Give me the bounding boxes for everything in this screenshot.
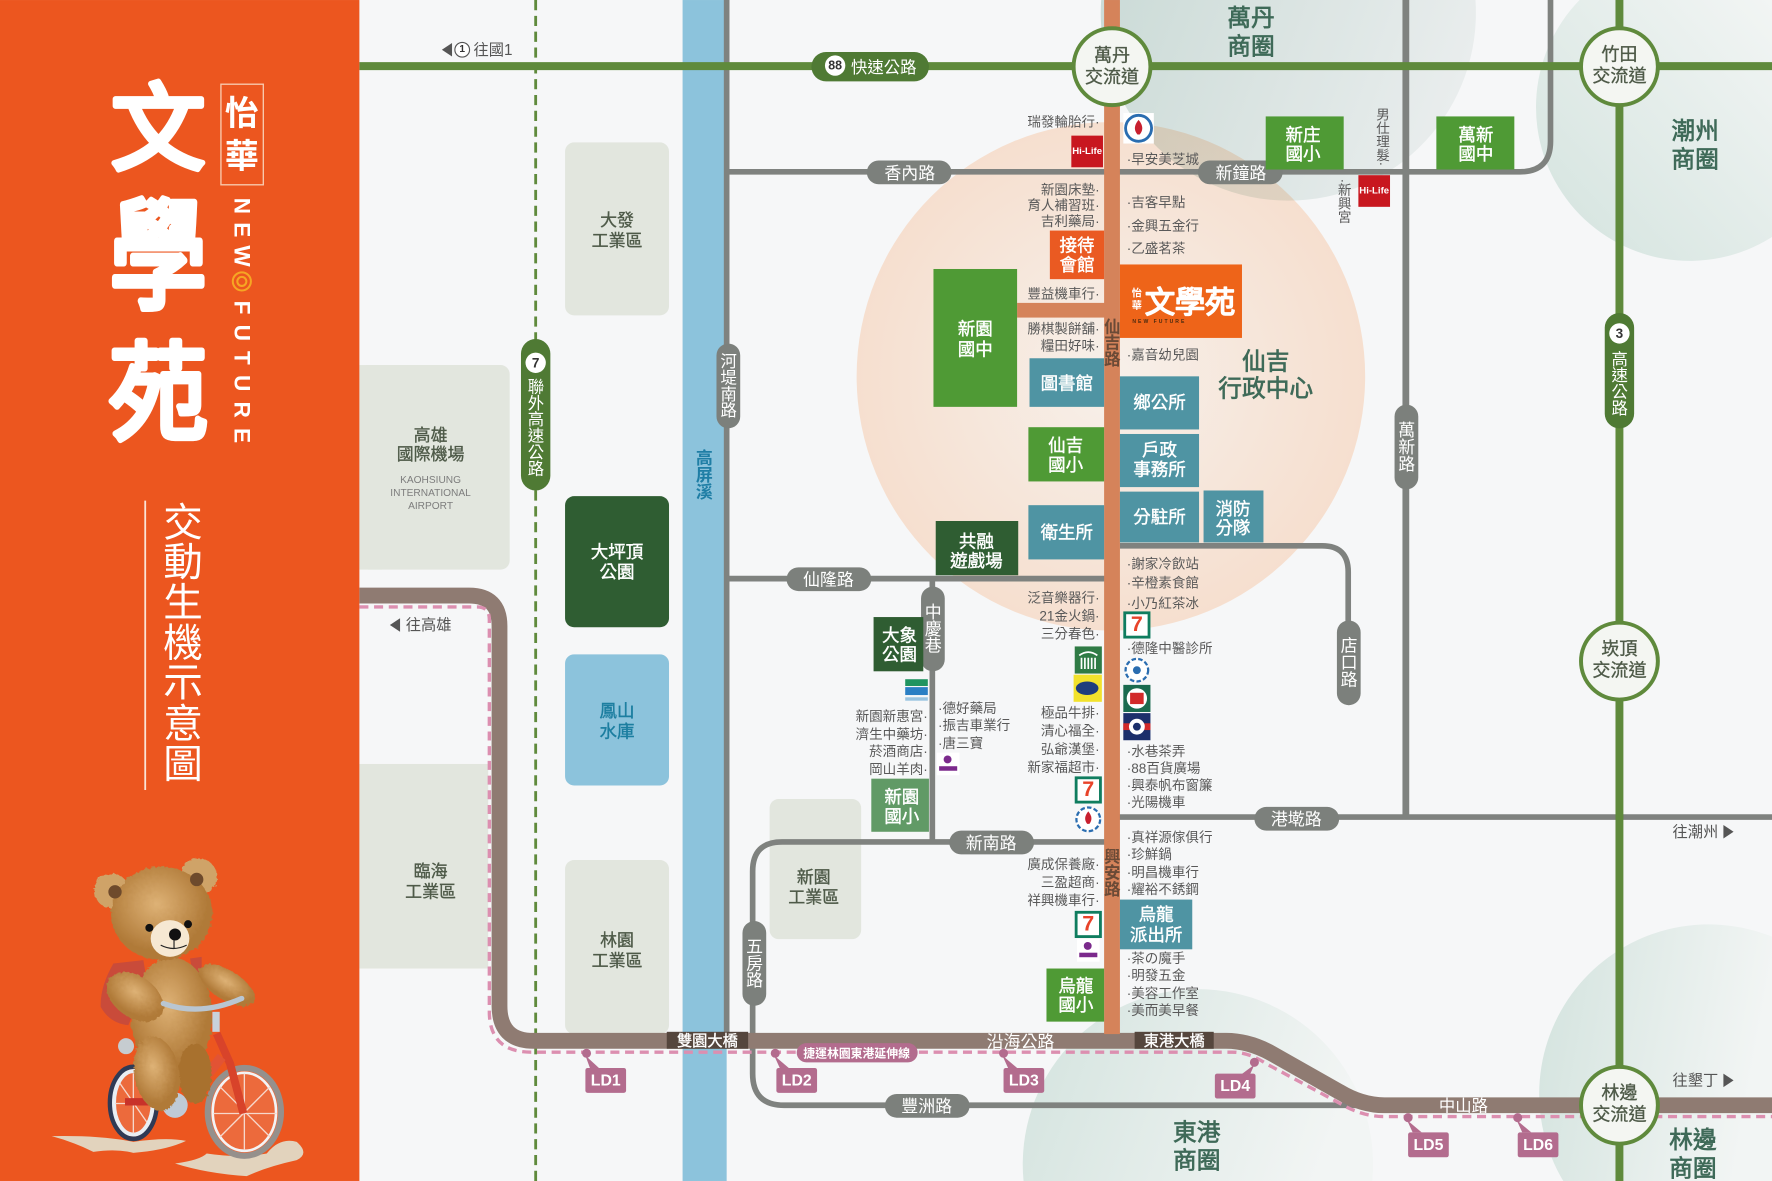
map background	[359, 0, 1772, 1181]
subtitle: traffic map: 機	[163, 622, 203, 666]
subtitle: traffic map: 生	[163, 581, 203, 625]
road label: Zhongqing lane	[921, 587, 945, 671]
metro line label: 捷運林園東港延伸線	[803, 1046, 910, 1060]
road: freeway 3	[1616, 0, 1623, 1181]
zone: Dafa industrial park	[565, 142, 669, 315]
circle: Linbian shopping district area	[1539, 924, 1772, 1181]
reservoir: Fengshan	[565, 654, 669, 785]
road label: Gangqian: 港墘路	[1271, 810, 1322, 829]
road label: Wufang: 五房路	[743, 937, 763, 988]
shops: right of main road: ·光陽機車	[1127, 795, 1185, 810]
road label: Xinnan	[949, 831, 1034, 854]
subtitle: traffic map: 意	[163, 702, 203, 746]
circle: Wandan shopping district area	[1101, 0, 1476, 201]
metro line: Linyuan Donggang extension	[359, 607, 1772, 1117]
road label: Donggang bridge: 東港大橋	[1144, 1033, 1205, 1050]
interchange: Zhutian	[1581, 28, 1658, 105]
logo: yellow shop	[1074, 675, 1102, 702]
road label: freeway 3	[1605, 313, 1634, 428]
shops: left of main road, north: 糧田好味·	[1041, 338, 1100, 353]
road label: Zhongshan: 中山路	[1439, 1097, 1488, 1115]
road: coastal highway	[359, 596, 1772, 1105]
district label: Wandan	[1227, 5, 1275, 60]
project logo: Wenxueyuan: 怡	[1132, 286, 1142, 299]
logo: clinic	[1126, 659, 1148, 681]
logo: Hi-Life north	[1071, 136, 1103, 167]
interchange: Linbian: 交流道	[1592, 1105, 1647, 1125]
icon: orange flower ornament	[233, 272, 251, 290]
title: Wenxueyuan: 文	[111, 77, 206, 183]
shops: left of main road, south: 三分春色·	[1041, 626, 1100, 642]
subtitle: traffic map: 交	[163, 501, 203, 545]
title: Wenxueyuan	[108, 77, 208, 454]
shops: along Zhongqing lane, east: ·德好藥局	[938, 701, 997, 716]
logo: Hi-Life north: Hi-Life	[1072, 146, 1102, 157]
library: 圖書館	[1041, 373, 1093, 393]
station: LD5: LD5	[1414, 1137, 1444, 1154]
shops: right of main road: ·茶の魔手	[1127, 951, 1185, 966]
district label: Donggang: 東港	[1173, 1119, 1221, 1146]
shops: right of main road: ·明發五金	[1127, 968, 1186, 983]
road label: expressway 88: 88	[828, 59, 842, 73]
township office	[1120, 376, 1199, 429]
river: Gaoping	[683, 0, 727, 1181]
reception hall: 接待	[1059, 236, 1094, 256]
direction: to Chaozhou: 往潮州	[1673, 824, 1718, 841]
shops: along Zhongqing lane, west	[856, 709, 928, 777]
logo: post office style	[1123, 685, 1150, 712]
zone: Linhai industrial park: 工業區	[405, 883, 456, 902]
household registration office	[1120, 434, 1199, 487]
subtitle: traffic map: 圖	[163, 743, 203, 787]
school: Xinyuan junior high: 國中	[958, 340, 993, 360]
shops: right of main road: ·金興五金行	[1127, 219, 1199, 234]
shops: left of main road, north: 勝棋製餅舖·	[1027, 321, 1100, 336]
shops: left of main road, south: 新家福超市·	[1027, 759, 1100, 775]
metro line label	[797, 1043, 918, 1062]
park: Dapingding: 大坪頂	[591, 542, 644, 562]
circle: Chaozhou shopping district area	[1536, 0, 1772, 261]
shops: right of main road: ·乙盛茗茶	[1127, 241, 1186, 256]
shops: left of main road, north: 瑞發輪胎行·	[1027, 114, 1100, 130]
road label: expressway 88	[811, 52, 929, 81]
circle: Xianji admin centre area	[857, 122, 1365, 631]
household registration office: 事務所	[1133, 459, 1186, 479]
police: Wulong: 派出所	[1130, 925, 1182, 945]
park: Dapingding	[565, 496, 669, 627]
zone: Xinyuan industrial park: 新園	[797, 868, 831, 887]
shops: right of main road: ·88百貨廣場	[1127, 760, 1201, 776]
school: Xinyuan elementary: 新園	[884, 787, 919, 807]
reception hall	[1050, 231, 1104, 279]
divider line	[144, 501, 146, 790]
shops: along Zhongqing lane, west: 濟生中藥坊·	[856, 727, 928, 742]
brand box: Yihua	[221, 84, 263, 185]
school: Xinyuan junior high	[933, 269, 1017, 407]
zone: Linhai industrial park	[359, 764, 488, 969]
zone: Linhai industrial park: 臨海	[414, 862, 448, 881]
station: LD4	[1215, 1058, 1259, 1098]
station: LD2: LD2	[782, 1072, 812, 1089]
brand box: Yihua: 怡	[225, 95, 259, 133]
road label: Gaoping river: 高屏溪	[693, 448, 712, 501]
logo: Hi-Life Xinxing: Hi-Life	[1359, 186, 1389, 197]
shops: right of main road: ·明昌機車行	[1127, 865, 1199, 880]
road label: Hedi South	[716, 344, 740, 428]
shops: right of main road: ·真祥源傢俱行	[1127, 830, 1213, 845]
road label: Wufang	[742, 921, 766, 1006]
shops: right of main road: ·美而美早餐	[1127, 1003, 1199, 1018]
station: LD1	[582, 1049, 626, 1093]
shops: left of main road, north: 吉利藥局·	[1041, 214, 1100, 229]
district label: Chaozhou: 商圈	[1671, 146, 1719, 173]
logo: 7-Eleven south	[1075, 911, 1102, 938]
road label: Zhongqing lane: 中慶巷	[922, 603, 941, 654]
brand: NEW FUTURE vertical: FUTURE	[229, 301, 254, 443]
road label: Diankou: 店口路	[1338, 637, 1357, 688]
logo: 7-Eleven mid	[1075, 776, 1102, 804]
logo: 7-Eleven mid: 7	[1082, 777, 1094, 801]
school: Xinyuan elementary: 國小	[884, 806, 920, 826]
district label: Xianji admin centre: 行政中心	[1218, 376, 1313, 403]
shops: left of main road, south: 廣成保養廠·	[1027, 856, 1100, 872]
township office: 鄉公所	[1133, 393, 1186, 413]
road label: Xiangnei: 香內路	[884, 164, 935, 183]
interchange: Kanding	[1581, 623, 1658, 700]
zone: Kaohsiung airport: KAOHSIUNG	[400, 475, 461, 486]
district label: Chaozhou	[1671, 118, 1719, 173]
shops: left of main road, south: 祥興機車行·	[1027, 893, 1100, 908]
station: LD3	[999, 1049, 1044, 1093]
shops: right of main road: ·珍鮮鍋	[1127, 847, 1172, 862]
inclusive playground: 遊戲場	[950, 551, 1003, 571]
reservoir: Fengshan: 水庫	[600, 722, 635, 742]
school: Wulong elementary	[1046, 969, 1104, 1022]
project logo: Wenxueyuan: 文學苑	[1145, 286, 1235, 320]
logo: 7-Eleven south: 7	[1082, 911, 1094, 935]
title: Wenxueyuan: 學	[110, 191, 207, 325]
district label: Xianji admin centre: 仙吉	[1242, 349, 1289, 376]
road label: freeway 3: 3	[1616, 326, 1624, 341]
zone: Xinyuan industrial park: 工業區	[788, 888, 839, 907]
school: Xinzhuang elementary: 國小	[1286, 144, 1321, 164]
shops: right of main road: ·耀裕不銹鋼	[1127, 882, 1199, 897]
road label: Diankou	[1337, 620, 1361, 705]
shops: left of main road, south: 清心福全·	[1041, 724, 1100, 739]
zone: Linyuan industrial park: 工業區	[592, 951, 643, 970]
shops: along Zhongqing lane, east: ·振吉車業行	[938, 718, 1010, 733]
road: Xianji and Xing'an main road	[1017, 0, 1121, 1034]
zone: Kaohsiung airport	[359, 365, 510, 570]
school: Xianji elementary: 仙吉	[1048, 436, 1083, 456]
health centre: 衛生所	[1041, 523, 1093, 543]
road label: freeway 3: 高速公路	[1609, 350, 1628, 416]
road: link freeway 7 dashed	[534, 0, 537, 1181]
shops: right of main road: ·早安美芝城	[1127, 152, 1199, 167]
inclusive playground	[936, 521, 1018, 575]
road label: Xiangnei	[867, 160, 952, 184]
logo: CPC gas north	[1123, 113, 1154, 144]
logo: Hi-Life Xinxing	[1358, 175, 1390, 207]
park: Dapingding: 公園	[600, 562, 635, 582]
household registration office: 戶政	[1142, 440, 1177, 460]
interchange: Wandan: 萬丹	[1094, 46, 1130, 66]
station: LD2	[771, 1049, 817, 1093]
road label: Shuangyuan bridge: 雙園大橋	[677, 1033, 738, 1050]
district label: Wandan: 萬丹	[1227, 5, 1275, 32]
school: Xianji elementary	[1028, 427, 1104, 481]
district label: Donggang: 商圈	[1173, 1148, 1221, 1175]
panel: orange sidebar	[0, 0, 359, 1181]
shops: along Zhongqing lane, east	[938, 701, 1010, 751]
shops: right of main road: ·興泰帆布窗簾	[1127, 778, 1213, 793]
police: Wulong: 烏龍	[1139, 905, 1174, 925]
direction: to freeway 1: 1	[459, 44, 465, 55]
zone: Kaohsiung airport: AIRPORT	[408, 501, 453, 512]
subtitle: traffic map: 動	[163, 541, 203, 585]
road label: Wanxin: 萬新路	[1395, 421, 1415, 472]
logo: farmers association tree	[1075, 646, 1102, 674]
logo: CPC gas mid	[1076, 807, 1100, 831]
direction: to freeway 1	[442, 42, 512, 59]
shops: right of main road: ·德隆中醫診所	[1127, 641, 1213, 656]
road label: Fengzhou: 豐洲路	[901, 1097, 952, 1116]
school: Wanxin junior high	[1436, 116, 1514, 170]
logo: 7-Eleven north: 7	[1131, 612, 1143, 636]
illustration: teddy bear riding a bicycle	[52, 858, 303, 1176]
shops: left of main road, south: 21金火鍋·	[1039, 608, 1100, 623]
subtitle: traffic map: 示	[163, 662, 203, 706]
shops: left of main road, south: 三盈超商·	[1041, 875, 1100, 890]
road: Xianji and Xing'an main road: 仙吉路	[1101, 318, 1121, 367]
road label: link freeway 7	[521, 339, 550, 490]
road label: Xinzhong: 新鐘路	[1215, 164, 1266, 183]
project logo: Wenxueyuan: NEW FUTURE	[1132, 319, 1185, 325]
school: Wulong elementary: 國小	[1058, 995, 1094, 1015]
road label: Gangqian	[1254, 807, 1339, 831]
project logo: Wenxueyuan: 華	[1132, 300, 1142, 312]
shops: right of main road: ·小乃紅茶冰	[1127, 596, 1199, 611]
school: Xinzhuang elementary	[1266, 116, 1344, 170]
roads: grey local road network	[727, 0, 1772, 1105]
school: Xinzhuang elementary: 新庄	[1286, 125, 1321, 145]
shop: barber vertical: 男仕理髮·	[1374, 107, 1390, 166]
shops: left of main road, north: 豐益機車行·	[1027, 286, 1100, 301]
police substation	[1120, 492, 1199, 542]
brand: NEW FUTURE vertical	[229, 198, 254, 443]
shops: left of main road, south: 弘爺漢堡·	[1041, 742, 1100, 757]
interchange: Zhutian: 交流道	[1592, 66, 1647, 86]
road label: Xianlong	[787, 567, 871, 591]
station: LD6: LD6	[1523, 1137, 1553, 1154]
road: expressway 88	[359, 63, 1772, 70]
road label: Wanxin	[1395, 405, 1418, 489]
health centre	[1028, 505, 1104, 559]
elephant park: 公園	[882, 645, 917, 665]
project logo: Wenxueyuan	[1120, 264, 1242, 338]
zone: Kaohsiung airport: 國際機場	[397, 445, 465, 464]
subtitle: traffic map	[163, 501, 203, 787]
circle: Donggang shopping district area	[1023, 989, 1373, 1181]
interchange: Linbian: 林邊	[1601, 1083, 1638, 1103]
interchange: Linbian	[1581, 1067, 1658, 1144]
shops: left of main road, south: 泛音樂器行·	[1027, 589, 1100, 605]
shops: left of main road, south	[1027, 589, 1100, 908]
shops: right of main road	[1127, 152, 1213, 1018]
brand box: Yihua: 華	[225, 138, 259, 176]
logo: purple pharmacy south	[1077, 939, 1100, 962]
shop: Xinxing temple vertical: ·新興宮	[1336, 179, 1351, 224]
shops: left of main road, north	[1027, 114, 1100, 353]
shops: right of main road: ·謝家冷飲站	[1127, 555, 1199, 571]
district label: Chaozhou: 潮州	[1671, 118, 1719, 145]
logo: green and blue bank	[905, 679, 928, 701]
shops: right of main road: ·美容工作室	[1127, 985, 1199, 1001]
school: Xinyuan junior high: 新園	[958, 319, 993, 339]
shops: left of main road, north: 育人補習班·	[1027, 198, 1100, 213]
school: Xinyuan elementary	[871, 779, 929, 832]
station: LD1: LD1	[591, 1072, 621, 1089]
zone: Linyuan industrial park: 林園	[600, 931, 634, 950]
shops: along Zhongqing lane, west: 新園新惠宮·	[856, 709, 928, 724]
logo: 7-Eleven north	[1123, 611, 1150, 639]
zone: Xinyuan industrial park	[770, 799, 861, 939]
shops: right of main road: ·吉客早點	[1127, 194, 1186, 210]
station: LD6	[1513, 1113, 1558, 1157]
road label: Xinnan: 新南路	[966, 834, 1017, 853]
logo: navy bank	[1123, 713, 1150, 740]
road label: link freeway 7: 聯外高速公路	[525, 378, 544, 476]
fire brigade: 消防	[1215, 499, 1250, 519]
police substation: 分駐所	[1133, 507, 1186, 527]
interchange: Kanding: 崁頂	[1601, 639, 1638, 659]
road label: Xianlong: 仙隆路	[803, 571, 854, 590]
interchange: Kanding: 交流道	[1592, 661, 1647, 681]
fire brigade: 分隊	[1215, 518, 1251, 538]
direction: to Kaohsiung: 往高雄	[406, 617, 451, 634]
interchange: Zhutian: 竹田	[1601, 45, 1638, 65]
elephant park	[874, 617, 923, 671]
school: Wanxin junior high: 萬新	[1458, 125, 1493, 145]
zone: Dafa industrial park: 工業區	[592, 232, 643, 251]
station: LD3: LD3	[1009, 1072, 1039, 1089]
direction: to Kenting: 往墾丁	[1673, 1071, 1718, 1089]
police: Wulong	[1120, 900, 1192, 949]
shops: along Zhongqing lane, east: ·唐三寶	[938, 735, 983, 751]
logo: purple pharmacy mid	[937, 753, 959, 775]
elephant park: 大象	[882, 625, 917, 645]
direction: to freeway 1: 往國1	[474, 42, 512, 59]
reservoir: Fengshan: 鳳山	[600, 701, 635, 721]
road label: Hedi South: 河堤南路	[718, 353, 737, 418]
inclusive playground: 共融	[959, 532, 994, 552]
school: Wulong elementary: 烏龍	[1058, 976, 1093, 996]
road label: expressway 88: 快速公路	[851, 59, 916, 77]
fire brigade	[1204, 490, 1263, 542]
brand: NEW FUTURE vertical: NEW	[229, 198, 254, 267]
district label: Xianji admin centre	[1218, 349, 1313, 403]
road label: link freeway 7: 7	[532, 355, 539, 370]
zone: Linyuan industrial park	[565, 860, 669, 1034]
zone: Kaohsiung airport: INTERNATIONAL	[390, 488, 471, 499]
station: LD4: LD4	[1220, 1078, 1250, 1095]
title: Wenxueyuan: 苑	[108, 333, 208, 454]
station: LD5	[1404, 1113, 1449, 1157]
road label: Fengzhou	[885, 1094, 970, 1118]
school: Xianji elementary: 國小	[1048, 455, 1084, 475]
road label: coastal highway: 沿海公路	[987, 1032, 1054, 1051]
road: Xianji and Xing'an main road: 興安路	[1101, 848, 1121, 897]
school: Wanxin junior high: 國中	[1458, 144, 1493, 164]
reception hall: 會館	[1059, 255, 1094, 275]
zone: Dafa industrial park: 大發	[600, 211, 634, 230]
interchange: Wandan: 交流道	[1085, 67, 1139, 87]
shops: left of main road, north: 新園床墊·	[1041, 182, 1100, 197]
district label: Linbian: 林邊	[1669, 1127, 1717, 1154]
shops: right of main road: ·嘉音幼兒園	[1127, 346, 1199, 362]
road label: Xinzhong	[1198, 160, 1283, 184]
district label: Donggang	[1173, 1119, 1221, 1175]
library	[1030, 358, 1104, 407]
shops: along Zhongqing lane, west: 菸酒商店·	[869, 744, 928, 759]
district label: Linbian	[1669, 1127, 1717, 1181]
zone: Kaohsiung airport: 高雄	[414, 426, 448, 445]
shops: right of main road: ·水巷茶弄	[1127, 744, 1185, 759]
shops: left of main road, south: 極品牛排·	[1041, 706, 1100, 721]
interchange: Wandan	[1074, 28, 1150, 105]
shops: along Zhongqing lane, west: 岡山羊肉·	[869, 762, 928, 777]
shops: right of main road: ·辛橙素食館	[1127, 575, 1199, 591]
district label: Wandan: 商圈	[1227, 33, 1275, 60]
